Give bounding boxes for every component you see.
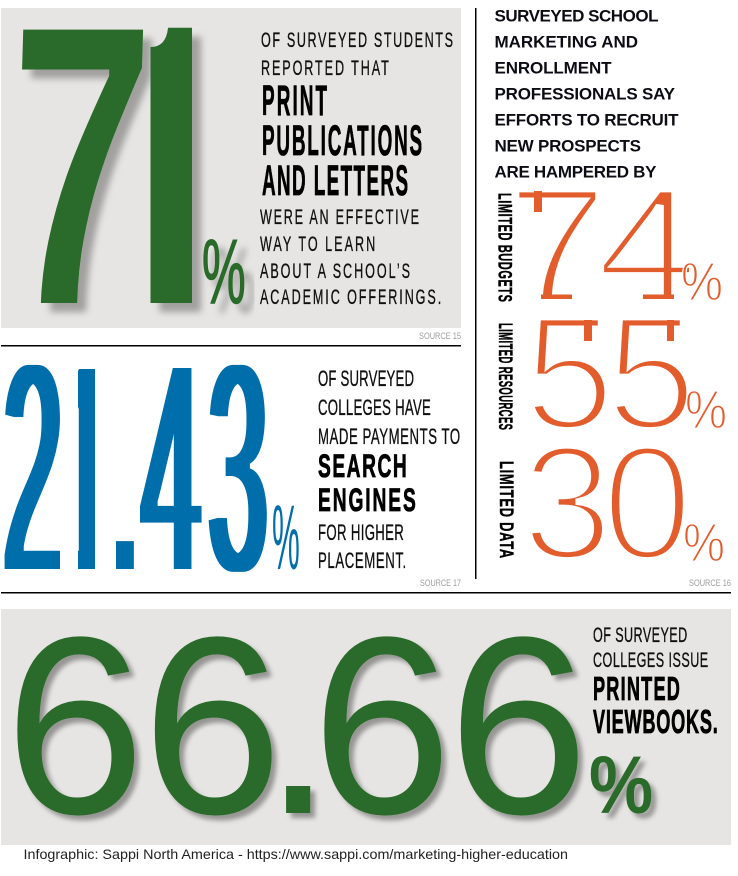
intro text: SURVEYED SCHOOL: [494, 6, 658, 26]
body text: VIEWBOOKS.: [593, 703, 718, 740]
panel: 66.66 percent printed viewbooks: [1, 584, 731, 867]
body text: PRINT: [262, 77, 327, 125]
body text: [260, 28, 453, 309]
body text: PUBLICATIONS: [262, 117, 422, 165]
panel background: [1, 8, 461, 328]
intro text: ARE HAMPERED BY: [494, 162, 657, 182]
body text: SEARCH: [318, 448, 407, 484]
number 74: 74: [506, 154, 698, 336]
percent sign: %: [589, 740, 653, 831]
intro text: NEW PROSPECTS: [494, 136, 641, 156]
intro text: PROFESSIONALS SAY: [494, 84, 676, 104]
body text: OF SURVEYED STUDENTS: [261, 28, 453, 52]
intro text: EFFORTS TO RECRUIT: [494, 110, 679, 130]
body text: REPORTED THAT: [261, 56, 389, 80]
percent sign: %: [272, 486, 300, 589]
percent sign: %: [685, 380, 727, 440]
intro text: ENROLLMENT: [494, 58, 612, 78]
panel: 71 percent print publications: [1, 8, 461, 339]
percent sign: %: [681, 252, 723, 312]
percent sign: %: [683, 513, 725, 573]
stat: limited budgets 74 percent: [494, 154, 723, 336]
body text: [318, 367, 460, 573]
intro text: MARKETING AND: [494, 32, 638, 52]
body text: AND LETTERS: [262, 157, 408, 205]
panel background: [1, 609, 731, 845]
body text: [593, 623, 718, 740]
big number 66.66: 66.66: [4, 584, 589, 867]
panel: hampered recruiting statistics: [494, 6, 731, 594]
body text: MADE PAYMENTS TO: [318, 425, 460, 449]
body text: WERE AN EFFECTIVE: [260, 205, 419, 229]
body text: ABOUT A SCHOOL’S: [260, 259, 410, 283]
body text: WAY TO LEARN: [260, 232, 375, 256]
body text: OF SURVEYED: [318, 367, 414, 391]
body text: COLLEGES HAVE: [318, 396, 431, 420]
body text: PLACEMENT.: [318, 549, 406, 573]
rotated label: LIMITED DATA: [495, 461, 516, 558]
source 15: SOURCE 15: [419, 331, 461, 341]
percent sign: %: [202, 222, 246, 323]
body text: PRINTED: [593, 670, 680, 707]
stat: limited resources 55 percent: [494, 281, 727, 464]
rotated label: LIMITED BUDGETS: [494, 193, 514, 302]
source 17: SOURCE 17: [420, 578, 461, 588]
big number 71: [22, 28, 205, 316]
body text: OF SURVEYED: [593, 623, 687, 647]
body text: COLLEGES ISSUE: [593, 648, 708, 672]
body text: FOR HIGHER: [318, 521, 404, 545]
body text: ENGINES: [318, 482, 416, 518]
rotated label: LIMITED RESOURCES: [494, 323, 515, 430]
number 30: 30: [522, 411, 693, 594]
big number 21.43: 21.43: [4, 303, 267, 635]
stat: limited data 30 percent: [495, 411, 725, 594]
body text: ACADEMIC OFFERINGS.: [260, 285, 441, 309]
intro text: [494, 6, 679, 182]
credit line: Infographic: Sappi North America - https://www.sappi.com/marketing-higher-education: [24, 846, 568, 862]
number 55: 55: [524, 281, 697, 464]
panel: 21.43 percent search engines: [4, 364, 461, 586]
